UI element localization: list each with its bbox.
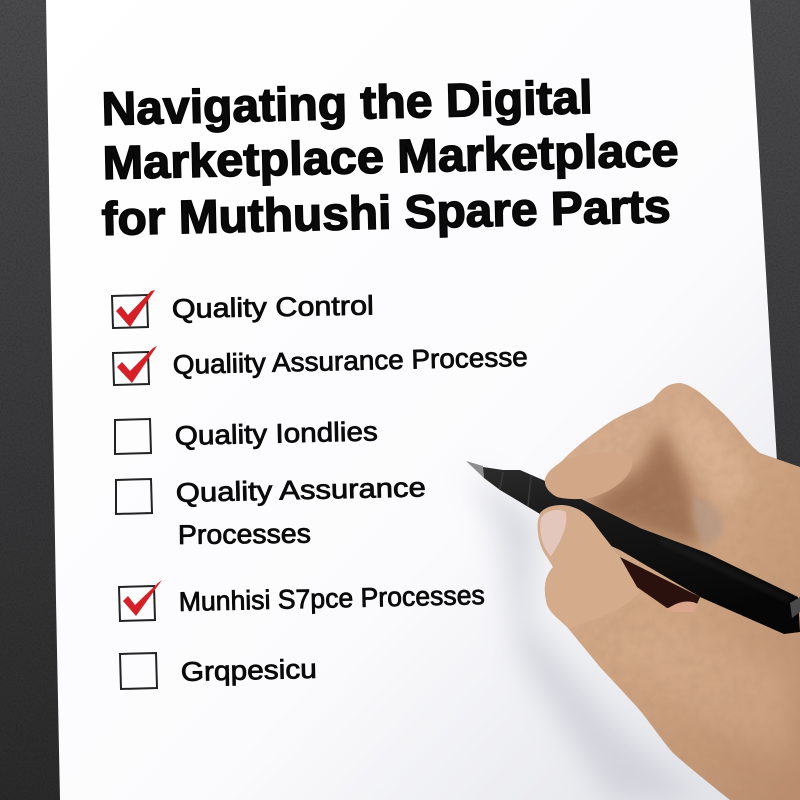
pen end cap (790, 597, 800, 618)
item: Grqpesicu (120, 653, 317, 689)
checklist (112, 290, 528, 689)
thumb over pen (538, 505, 640, 628)
item: Quality Control: Quality Control (172, 290, 374, 324)
pen (466, 461, 800, 634)
item: Quality Assurance Processe: Qualiity Assurance Processe (172, 342, 528, 380)
title: for Muthushi Spare Parts (101, 179, 671, 245)
thumbnail (540, 510, 566, 556)
dark gap under pen (620, 557, 700, 608)
item: Quality Assurance Processes: Processes (178, 519, 311, 550)
item: Grqpesicu: Grqpesicu (180, 654, 317, 687)
title (101, 70, 679, 245)
item: Quality Control (112, 290, 374, 328)
item: Quality Assurance Processes (116, 472, 426, 550)
title: Marketplace Marketplace (102, 123, 679, 189)
palm and fingers (537, 383, 800, 800)
brown shadow under index finger (590, 428, 702, 548)
knuckle fold (693, 497, 723, 547)
pen barrel highlight (660, 540, 790, 600)
index fingertip over pen (545, 453, 632, 499)
pen grip ring (500, 472, 531, 506)
item: Munhisi S7pce Processes: Munhisi S7pce Processes (178, 580, 485, 617)
skin mottling (724, 452, 728, 472)
pen barrel (483, 467, 800, 634)
pink palm crease below gap (667, 601, 698, 612)
lower palm highlight (666, 644, 786, 746)
pen nib (466, 461, 484, 478)
item: Quality Assurance Processes: Quality Assurance (175, 472, 426, 508)
item: Quality Iondlies: Quality Iondlies (174, 416, 378, 451)
skin shading (582, 420, 786, 746)
item: Quality Iondlies (115, 416, 378, 454)
hand shadow on paper (470, 470, 700, 800)
title: Navigating the Digital (101, 70, 593, 135)
hand holding pen (466, 380, 800, 800)
back of hand highlight (682, 414, 748, 499)
